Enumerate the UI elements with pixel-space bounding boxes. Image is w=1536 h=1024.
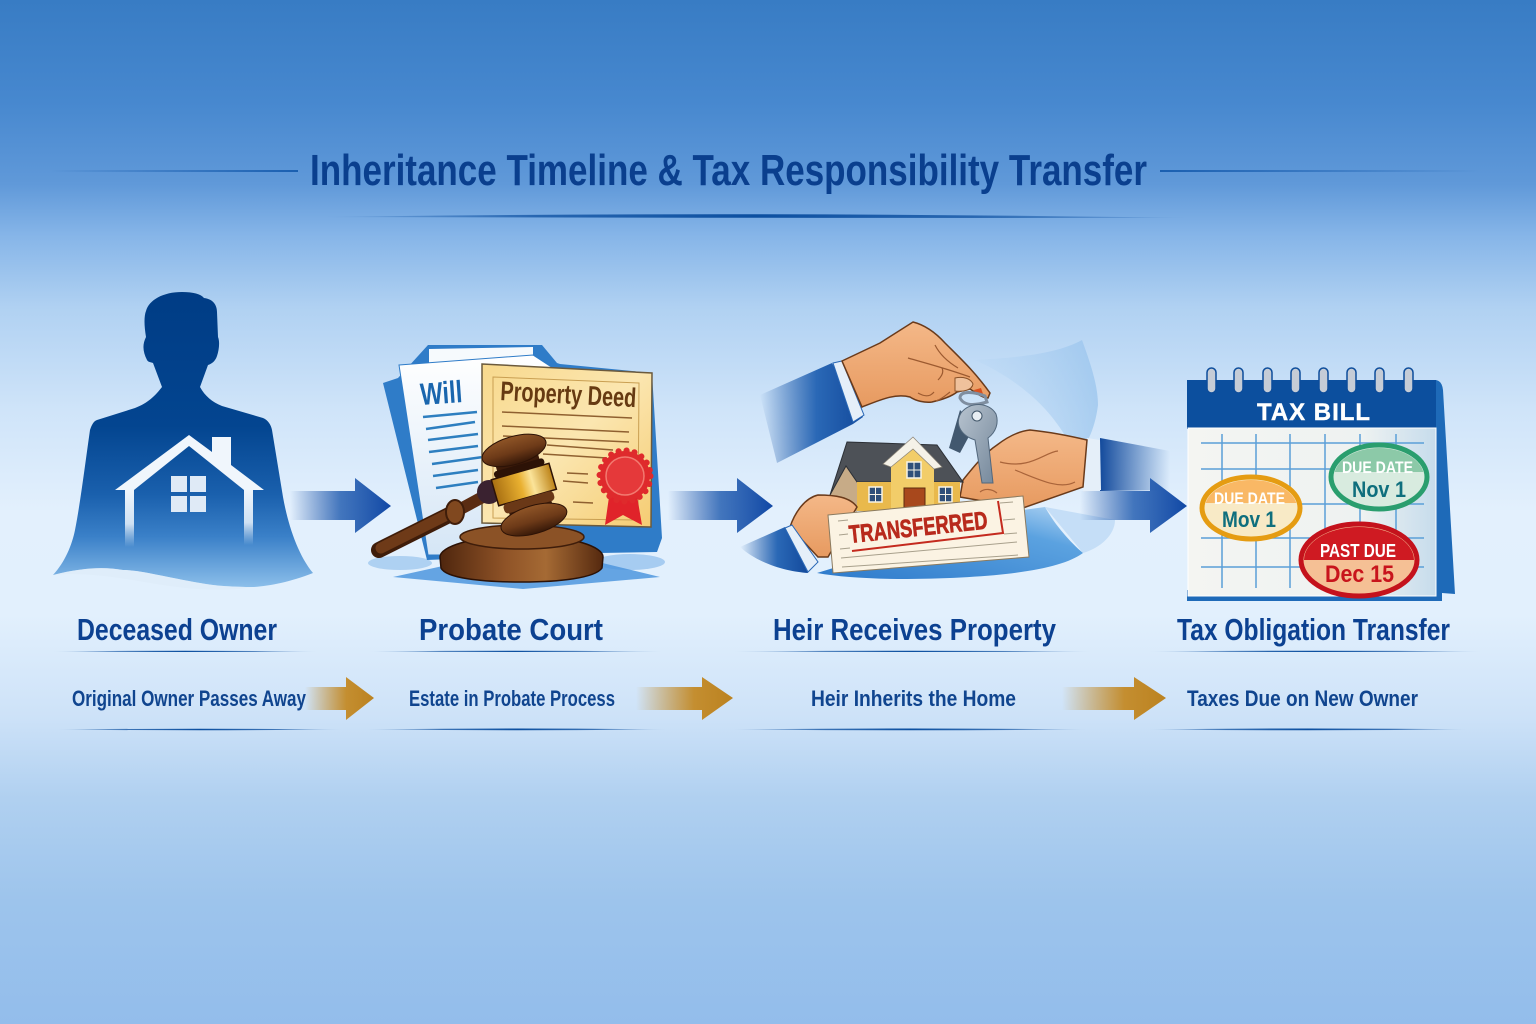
badge: past due red: Dec 15 — [1325, 561, 1394, 588]
calendar rings — [1207, 368, 1413, 393]
panel: tax obligation transfer — [1145, 368, 1485, 730]
arrow: gold step one — [305, 677, 374, 720]
icon: receiving hand right — [960, 430, 1170, 508]
icon: person silhouette — [53, 292, 313, 587]
heading: heir receives property: Heir Receives Property — [773, 612, 1057, 647]
icon: red seal — [600, 450, 650, 525]
badge: due date orange: Mov 1 — [1222, 507, 1276, 532]
panel: probate court — [365, 345, 670, 730]
icon: small house — [830, 437, 963, 512]
icon: will and blue folder: Will — [419, 374, 463, 412]
illustration shadow — [368, 554, 665, 589]
icon: keys — [949, 392, 997, 483]
icon: tax bill calendar: TAX BILL — [1257, 399, 1370, 426]
title text: Inheritance Timeline & Tax Responsibility Transfer — [310, 146, 1147, 195]
caption: taxes due: Taxes Due on New Owner — [1187, 686, 1418, 711]
panel: heir receives property — [730, 322, 1170, 730]
icon: tax bill calendar — [1187, 368, 1455, 601]
heading: tax obligation transfer: Tax Obligation Transfer — [1177, 612, 1450, 647]
badge: past due red: PAST DUE — [1320, 541, 1396, 561]
icon: house in silhouette — [115, 435, 264, 547]
badge: due date orange: DUE DATE — [1214, 489, 1285, 508]
light swoosh — [1045, 507, 1115, 553]
arrow: heir to tax — [1080, 478, 1187, 533]
blue swoosh — [817, 507, 1083, 579]
arrow: gold step three — [1062, 677, 1166, 720]
caption: estate in probate: Estate in Probate Process — [409, 686, 615, 711]
arrow: probate to heir — [668, 478, 773, 533]
caption: original owner: Original Owner Passes Away — [72, 686, 307, 711]
badge: past due red — [1301, 524, 1417, 596]
heading: deceased owner: Deceased Owner — [77, 612, 277, 647]
badge: due date green: DUE DATE — [1342, 458, 1413, 477]
panel: deceased owner — [50, 292, 345, 730]
icon: property deed — [482, 364, 652, 527]
icon: giving hand — [760, 322, 990, 463]
badge: due date orange — [1202, 477, 1300, 539]
icon: transferred document — [828, 496, 1029, 573]
icon: will and blue folder — [383, 345, 662, 560]
heading: probate court: Probate Court — [419, 612, 603, 647]
decorative wisp — [975, 340, 1098, 455]
badge: due date green: Nov 1 — [1352, 477, 1406, 502]
icon: gavel — [379, 428, 603, 582]
arrow: owner to probate — [290, 478, 391, 533]
calendar grid — [1201, 434, 1424, 588]
icon: property deed: Property Deed — [500, 376, 637, 413]
icon: receiving hand left — [740, 495, 857, 573]
caption: heir inherits: Heir Inherits the Home — [811, 686, 1016, 711]
badge: due date green — [1331, 445, 1427, 509]
title — [50, 146, 1480, 218]
icon: transferred document: TRANSFERRED — [848, 507, 989, 549]
arrow: gold step two — [636, 677, 733, 720]
